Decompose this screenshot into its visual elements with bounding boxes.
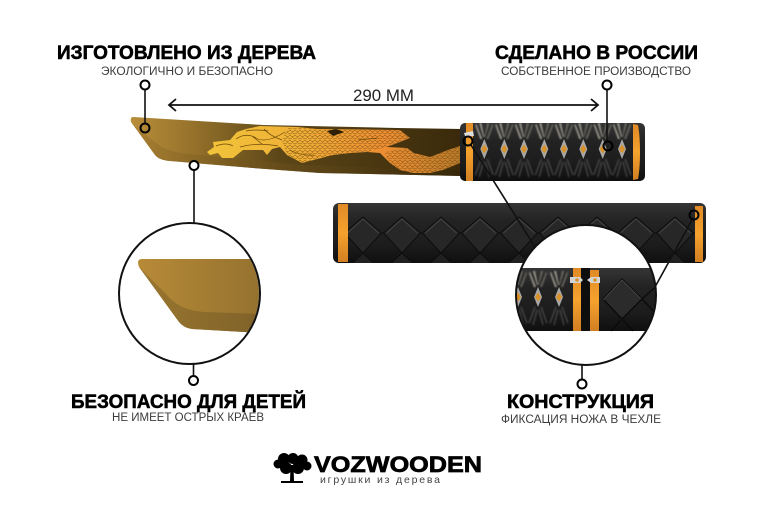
leader lines bbox=[145, 90, 692, 379]
knife blade with dragon bbox=[131, 117, 462, 176]
heading: made in Russia: СОБСТВЕННОЕ ПРОИЗВОДСТВО bbox=[501, 66, 691, 78]
logo: VOZWOODEN bbox=[274, 452, 482, 486]
heading: safe for children: БЕЗОПАСНО ДЛЯ ДЕТЕЙ bbox=[71, 391, 306, 413]
zoom circle: construction detail bbox=[509, 225, 665, 365]
heading: safe for children bbox=[71, 391, 306, 424]
heading: construction: КОНСТРУКЦИЯ bbox=[507, 392, 654, 413]
dimension arrow: 290 mm bbox=[169, 87, 598, 111]
icon: tree bbox=[274, 453, 312, 483]
infographic bbox=[58, 45, 706, 485]
logo: VOZWOODEN: игрушки из дерева bbox=[320, 474, 440, 486]
scabbard bbox=[333, 203, 706, 263]
callout markers bbox=[140, 80, 698, 388]
zoom circle: blade tip bbox=[119, 223, 262, 364]
dimension arrow: 290 mm: 290 ММ bbox=[353, 87, 414, 105]
heading: made in Russia: СДЕЛАНО В РОССИИ bbox=[495, 43, 698, 64]
knife handle bbox=[460, 122, 645, 182]
heading: construction bbox=[501, 392, 661, 426]
heading: construction: ФИКСАЦИЯ НОЖА В ЧЕХЛЕ bbox=[501, 414, 661, 426]
heading: made of wood: ЭКОЛОГИЧНО И БЕЗОПАСНО bbox=[101, 66, 273, 78]
heading: made of wood: ИЗГОТОВЛЕНО ИЗ ДЕРЕВА bbox=[57, 43, 316, 64]
logo: VOZWOODEN: VOZWOODEN bbox=[314, 452, 482, 477]
heading: made in Russia bbox=[495, 43, 698, 78]
heading: made of wood bbox=[57, 43, 316, 78]
heading: safe for children: НЕ ИМЕЕТ ОСТРЫХ КРАЕВ bbox=[112, 412, 264, 424]
dragon artwork bbox=[207, 126, 460, 173]
